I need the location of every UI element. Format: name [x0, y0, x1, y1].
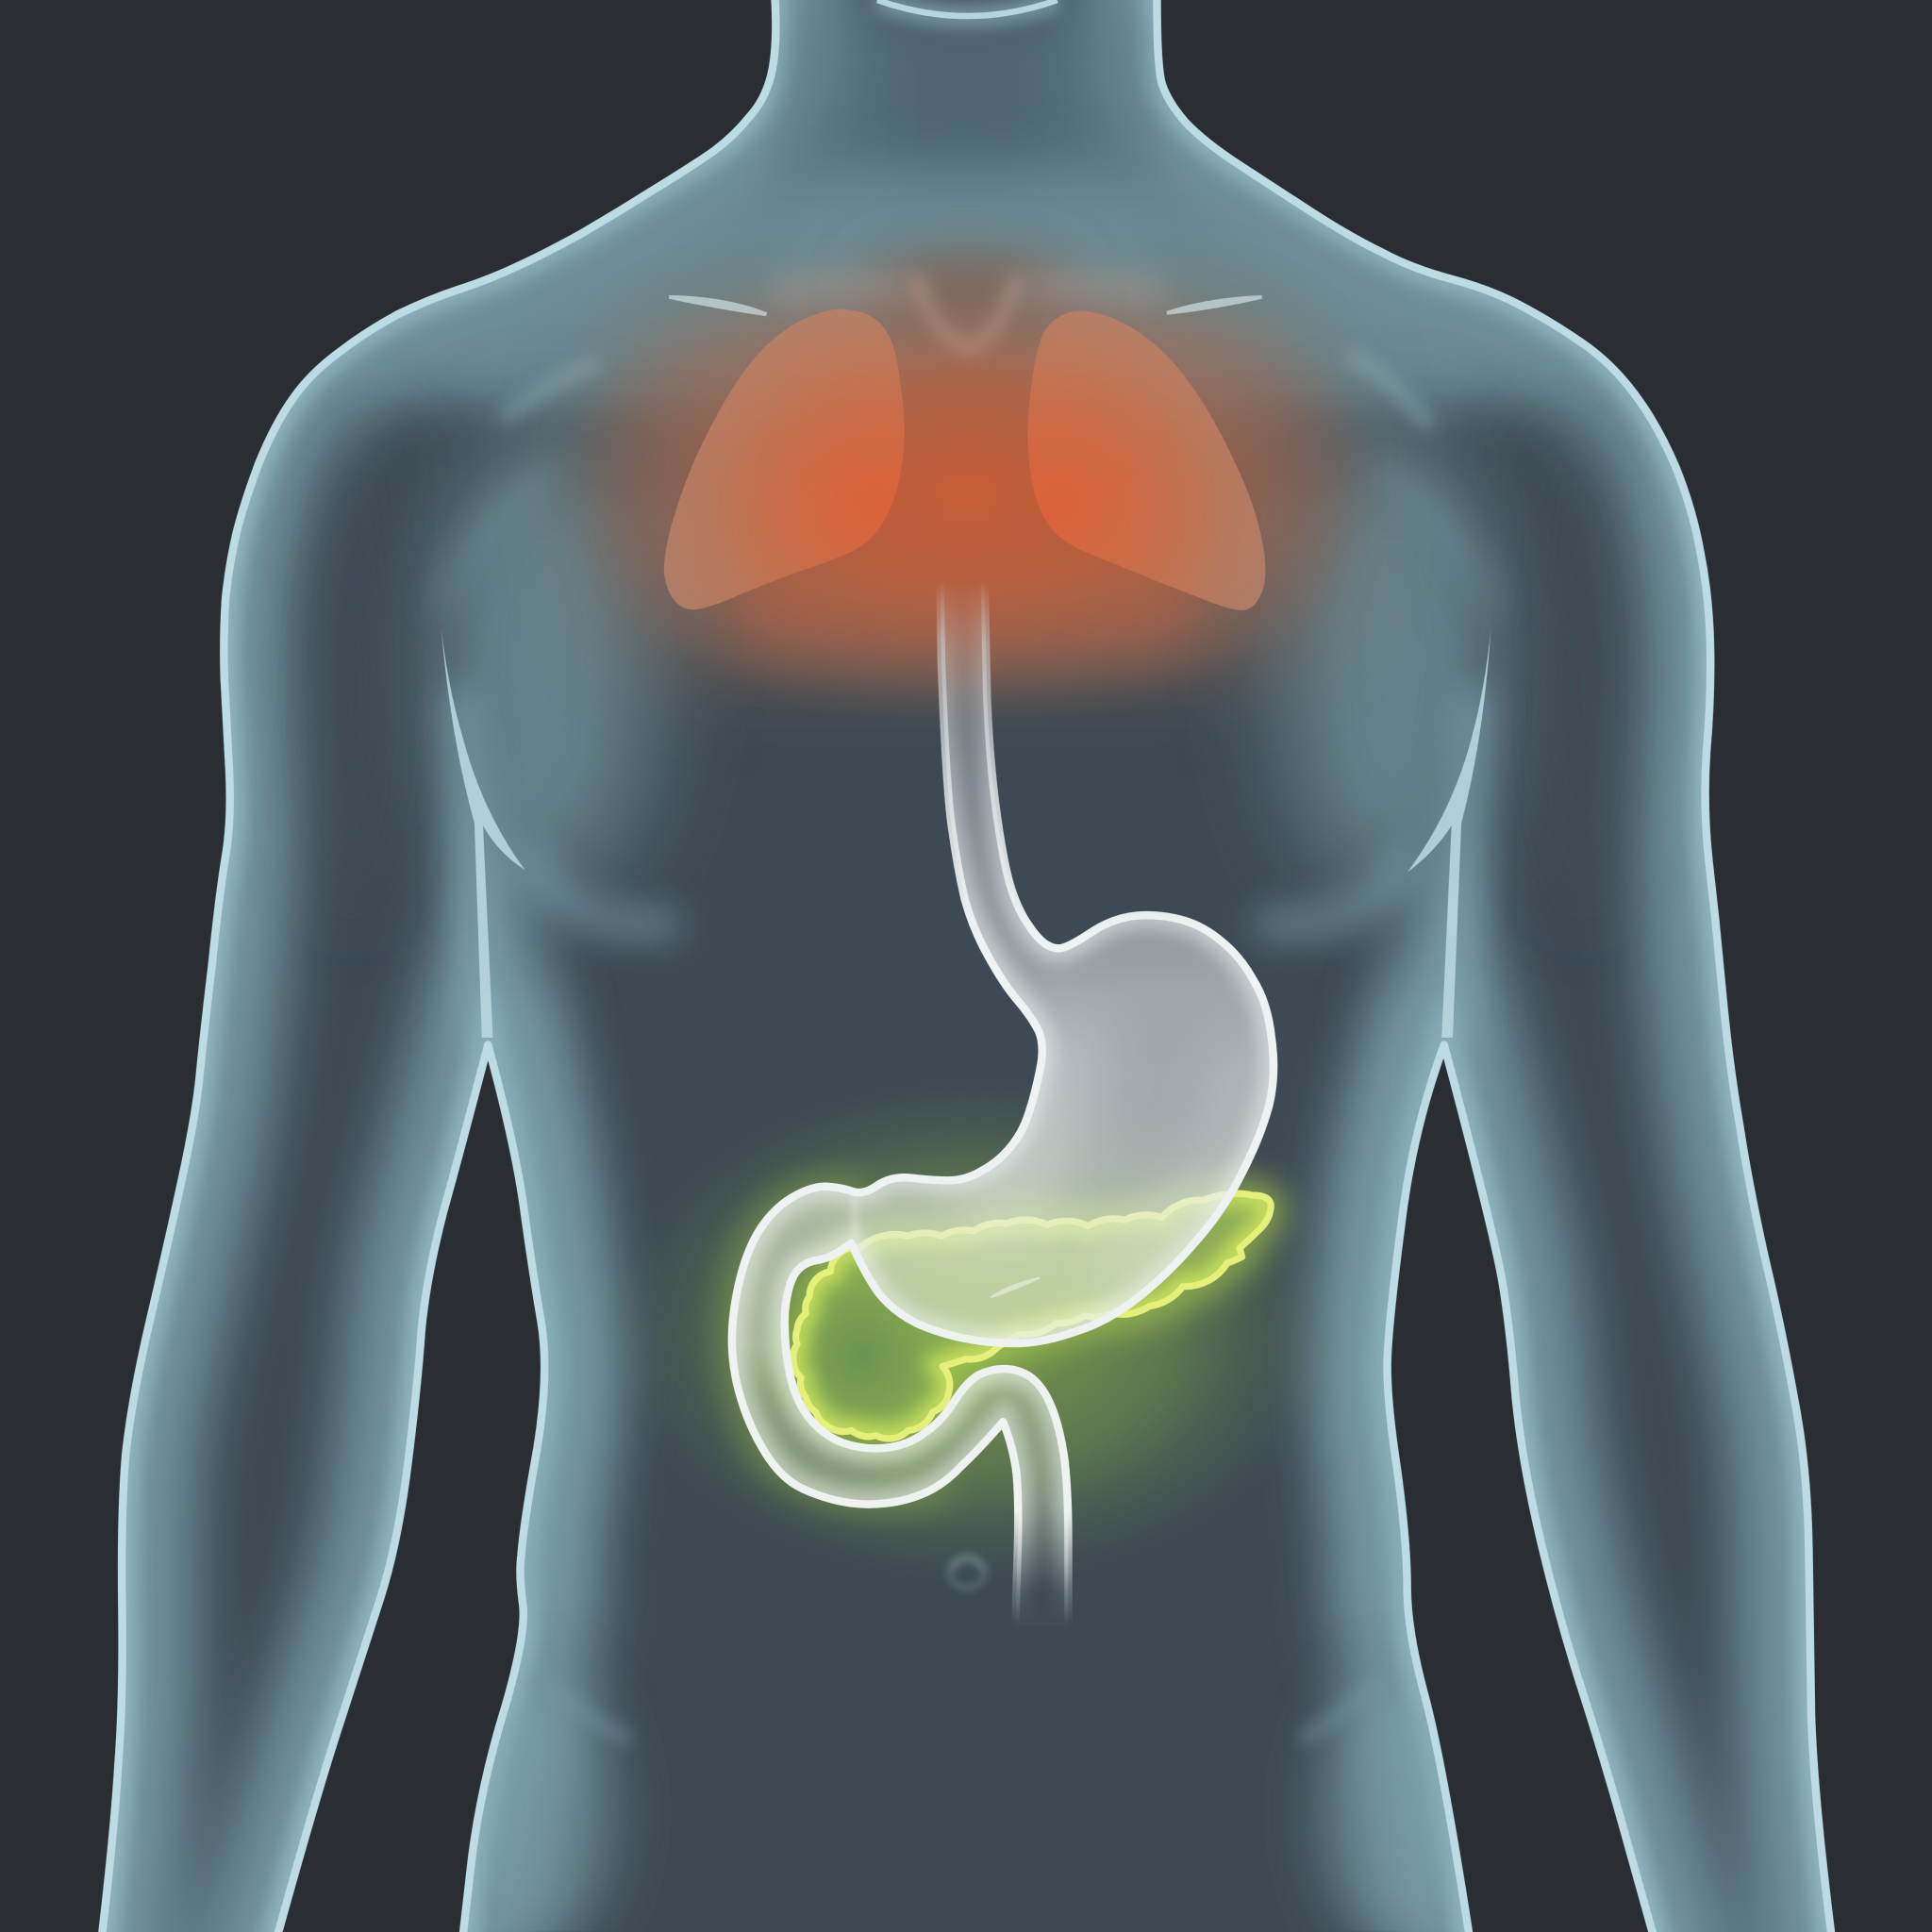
green glow around pancreas — [604, 1072, 1343, 1590]
collarbone highlights — [669, 286, 1261, 314]
deltoid grooves — [508, 358, 1426, 422]
organ translucent fill — [732, 579, 1274, 1626]
chin arc — [877, 0, 1058, 16]
pancreas inner glow — [793, 1193, 1271, 1439]
stomach inner highlight — [991, 1277, 1040, 1297]
arm inner edge light — [460, 690, 1474, 1047]
esophagus, stomach and duodenum — [732, 579, 1274, 1626]
pancreas fill — [793, 1193, 1271, 1439]
organ inner edge glow — [732, 579, 1274, 1626]
left arm-torso contour — [441, 628, 525, 1038]
warm band below lungs — [740, 492, 1195, 653]
hip creases — [542, 1681, 1377, 1738]
upper chest and shoulder band — [358, 173, 1577, 411]
sternal notch highlight — [918, 281, 1015, 347]
pancreas outline — [793, 1193, 1271, 1439]
pancreas halo — [793, 1193, 1271, 1439]
abdomen flank light — [506, 986, 1429, 1626]
navel — [950, 1557, 985, 1589]
neck shading — [766, 0, 1168, 214]
brown glow at throat — [862, 251, 1072, 321]
dark upper arm core — [274, 404, 1662, 858]
lower pectoral crease — [530, 862, 1405, 924]
organ outline — [732, 579, 1274, 1626]
lime halo around duodenum — [736, 1190, 949, 1498]
red inflammation glow across the chest — [542, 241, 1392, 733]
core glow — [542, 241, 1392, 733]
hip light — [471, 1675, 1464, 1932]
pyloric fold — [853, 1192, 858, 1247]
pectoral light — [431, 431, 1503, 899]
stomach lesser-curve sheen — [974, 1023, 1061, 1214]
grey-brown veil — [604, 302, 1331, 665]
right lung — [1027, 311, 1265, 610]
right arm-torso contour — [1407, 628, 1491, 1038]
armpit folds — [443, 466, 1491, 604]
left lung — [664, 309, 905, 609]
stomach greater-curve sheen — [1109, 1047, 1251, 1293]
pancreas — [793, 1193, 1271, 1439]
